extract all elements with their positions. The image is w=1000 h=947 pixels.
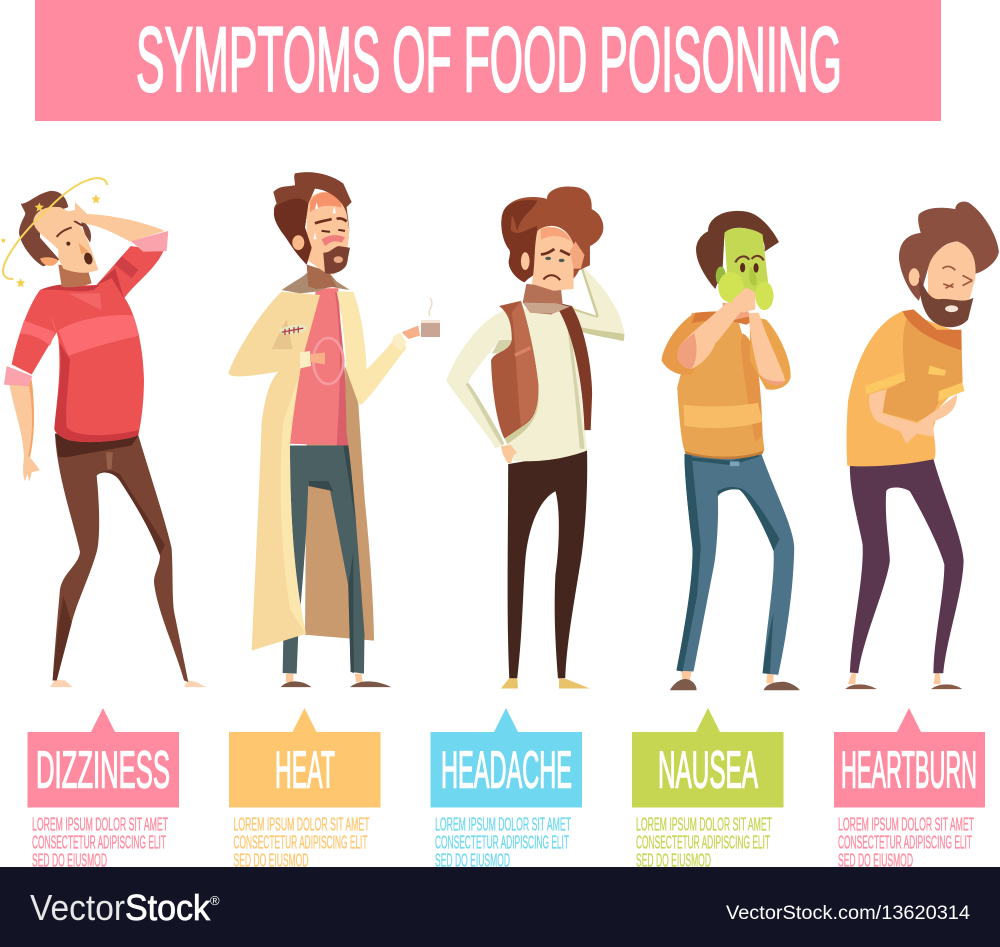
ankles and slippers xyxy=(286,674,363,682)
trousers xyxy=(283,445,366,674)
t-shirt xyxy=(290,288,348,445)
trousers xyxy=(53,434,188,682)
coat cuffs xyxy=(300,332,407,368)
footer logo: Stock xyxy=(125,887,211,928)
coat xyxy=(228,292,407,651)
hair xyxy=(501,186,603,282)
beard xyxy=(323,246,350,274)
hands over mouth xyxy=(732,287,755,313)
shoes xyxy=(501,678,590,688)
neck xyxy=(723,303,750,320)
eyes and sweat xyxy=(313,202,347,239)
label: nausea xyxy=(632,708,784,808)
stars xyxy=(1,194,101,287)
dizzy halo xyxy=(3,178,107,279)
text: LOREM IPSUM DOLOR SIT AMET xyxy=(32,814,168,834)
text: CONSECTETUR ADIPISCING ELIT xyxy=(32,832,166,852)
hair xyxy=(273,172,352,265)
arms xyxy=(677,294,786,385)
text: dizziness description xyxy=(32,814,168,870)
facial features xyxy=(541,249,570,280)
trousers xyxy=(508,450,587,678)
shoes xyxy=(845,684,963,689)
text: dizziness description: SED DO EIUSMOD xyxy=(32,850,107,870)
figure: headache man xyxy=(446,186,624,688)
hair xyxy=(19,191,91,266)
t-shirt xyxy=(847,309,964,466)
text: headache description: SED DO EIUSMOD xyxy=(435,850,510,870)
shirt xyxy=(446,267,624,461)
hanging arm xyxy=(9,380,40,482)
raised arm xyxy=(85,214,165,242)
text: LOREM IPSUM DOLOR SIT AMET xyxy=(636,814,772,834)
text: CONSECTETUR ADIPISCING ELIT xyxy=(435,832,569,852)
collar and neck xyxy=(282,271,350,293)
ear xyxy=(292,235,304,250)
ankles xyxy=(681,670,774,683)
text: heartburn description xyxy=(838,814,974,870)
beard xyxy=(919,277,973,327)
face xyxy=(928,241,976,304)
facial features xyxy=(57,221,94,265)
face xyxy=(307,192,349,275)
label: dizziness: DIZZINESS xyxy=(36,742,170,800)
lower hand xyxy=(501,445,517,464)
label: dizziness xyxy=(28,708,179,808)
green face xyxy=(724,228,768,306)
jeans xyxy=(676,452,794,675)
label: nausea: NAUSEA xyxy=(658,742,758,800)
hair xyxy=(696,211,779,289)
sweater xyxy=(12,246,163,442)
neck and collar xyxy=(523,284,563,314)
text: CONSECTETUR ADIPISCING ELIT xyxy=(636,832,770,852)
shoes xyxy=(670,679,800,690)
label: heat: HEAT xyxy=(275,742,335,800)
hands xyxy=(310,325,420,364)
facial features xyxy=(735,256,764,286)
figure: heat man with coat xyxy=(228,172,420,687)
text: LOREM IPSUM DOLOR SIT AMET xyxy=(234,814,370,834)
trousers xyxy=(850,459,964,673)
text: heat description: SED DO EIUSMOD xyxy=(234,850,308,870)
text: CONSECTETUR ADIPISCING ELIT xyxy=(234,832,368,852)
ankles xyxy=(848,673,941,684)
label: heartburn xyxy=(834,708,985,808)
t-shirt xyxy=(662,311,791,459)
footer bar xyxy=(0,867,1000,947)
footer logo: Vector xyxy=(30,887,125,928)
red nose xyxy=(322,235,345,246)
text: headache description xyxy=(435,814,571,870)
figure: dizziness man xyxy=(1,178,206,687)
hair xyxy=(899,202,999,301)
figure: heartburn man xyxy=(845,202,999,689)
face xyxy=(33,207,98,273)
text: heartburn description: SED DO EIUSMOD xyxy=(838,850,913,870)
label: headache xyxy=(430,708,582,808)
vest xyxy=(491,301,592,444)
footer url: VectorStock.com/13620314 xyxy=(726,903,970,924)
hand on head xyxy=(570,241,584,269)
neck xyxy=(58,265,92,287)
label: heat xyxy=(229,708,380,808)
coat lining xyxy=(305,407,374,640)
text: heat description xyxy=(234,814,370,870)
text: nausea description xyxy=(636,814,772,870)
footer logo xyxy=(30,887,220,928)
footer logo: ® xyxy=(210,893,220,908)
text: nausea description: SED DO EIUSMOD xyxy=(636,850,711,870)
face xyxy=(532,227,574,291)
coffee cup xyxy=(421,298,440,337)
text: HEADACHE xyxy=(441,742,572,800)
arms xyxy=(869,389,957,444)
text: LOREM IPSUM DOLOR SIT AMET xyxy=(435,814,571,834)
figure: nausea man xyxy=(662,211,800,690)
hand on forehead xyxy=(63,202,88,224)
thermometer xyxy=(279,323,308,336)
feet xyxy=(50,680,206,687)
sweater cuffs xyxy=(4,231,168,386)
facial features xyxy=(943,266,972,288)
